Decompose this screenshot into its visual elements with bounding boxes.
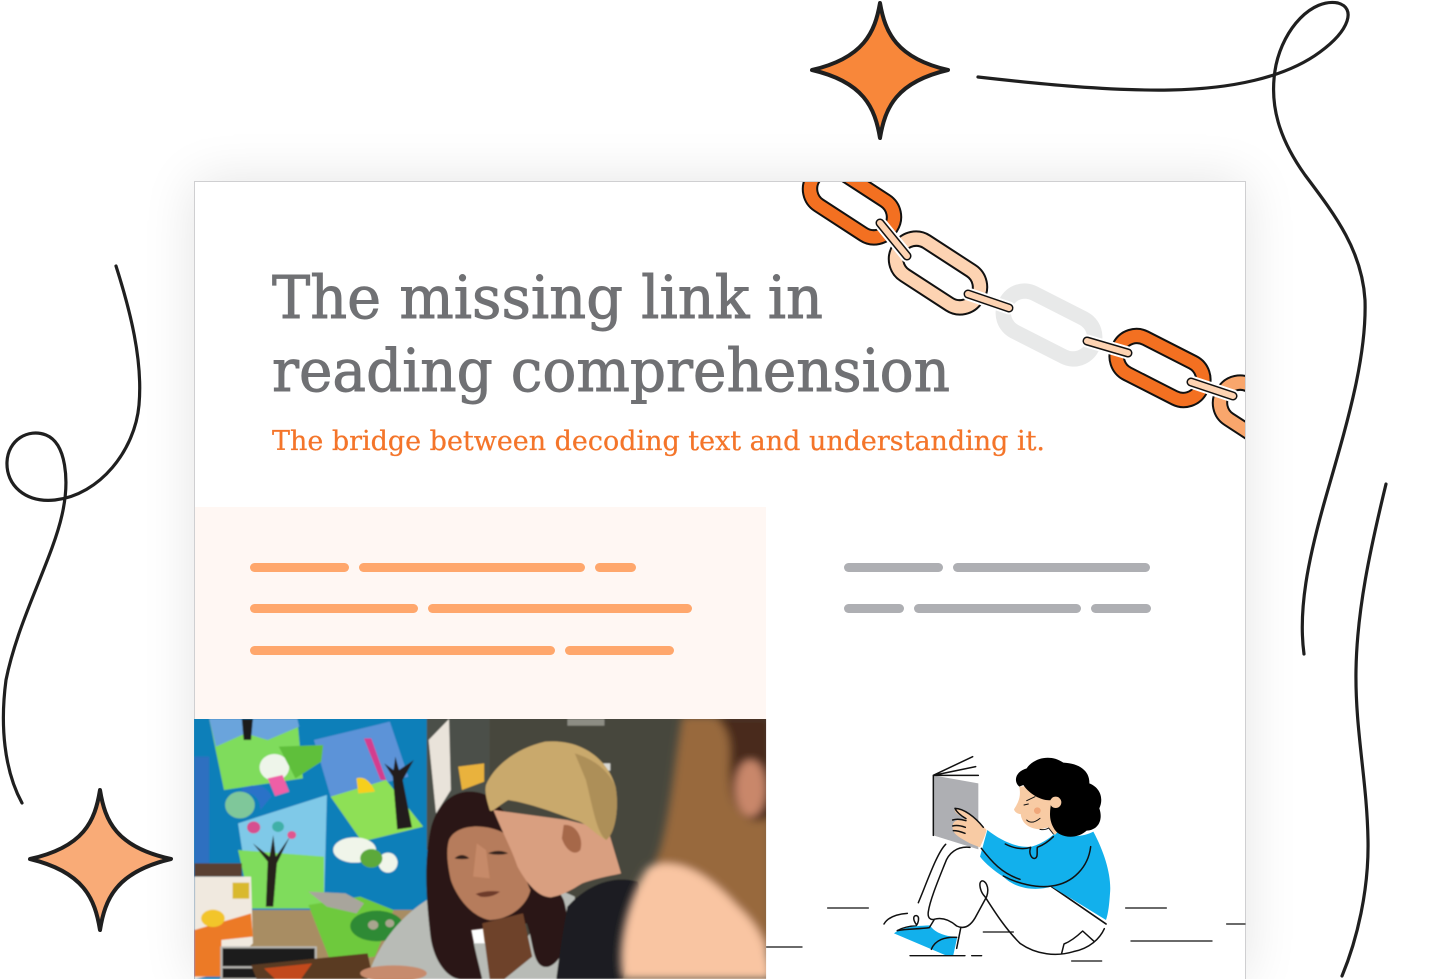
connector bar 1 (880, 223, 907, 256)
boy hair (485, 741, 617, 840)
squiggle: left loop (3, 266, 140, 803)
connector bar 3 (1087, 341, 1128, 353)
yoda face (350, 911, 403, 941)
craft box (221, 947, 316, 967)
foreground girl (621, 717, 771, 979)
hand (360, 965, 427, 979)
decorative star: peach bottom left (30, 790, 171, 930)
boy shirt (556, 879, 639, 979)
link: peach 2 (888, 230, 988, 316)
title: reading comprehension (272, 336, 950, 405)
teacher sweater (368, 890, 575, 979)
hair (1016, 758, 1101, 837)
illustration: child reading a book (767, 757, 1245, 961)
snack box (194, 863, 242, 877)
teacher face (447, 827, 530, 920)
hand pointing (953, 808, 987, 847)
torso sweater (980, 830, 1110, 920)
placeholder text bars grey (844, 563, 1151, 613)
artwork papers (209, 719, 303, 790)
photo: teacher and student reading (190, 717, 771, 979)
neck and face (1014, 783, 1073, 835)
ground lines (767, 908, 1245, 961)
link: missing grey (996, 284, 1102, 366)
teacher hair (426, 792, 567, 979)
squiggle: top right loop (978, 2, 1365, 654)
subtitle: The bridge between decoding text and understanding it. (272, 426, 1045, 457)
link: orange 4 (1108, 328, 1212, 408)
link: orange 1 (802, 182, 902, 246)
shoe (894, 920, 961, 955)
link: peach 5 (1212, 374, 1245, 440)
placeholder text bars orange (250, 563, 692, 655)
squiggle: right lower (1342, 484, 1386, 976)
connector bar 2 (968, 294, 1009, 308)
decorative star: orange top (812, 3, 948, 138)
boy face and neck (493, 810, 621, 897)
chain illustration (802, 182, 1245, 440)
legs (884, 844, 1106, 954)
ear (1050, 797, 1061, 808)
title (272, 263, 950, 405)
panel: peach text placeholder (195, 507, 766, 719)
book (933, 757, 978, 849)
title: The missing link in (272, 263, 823, 332)
connector bar 4 (1191, 382, 1233, 396)
book (251, 953, 373, 979)
card background (194, 181, 1246, 979)
